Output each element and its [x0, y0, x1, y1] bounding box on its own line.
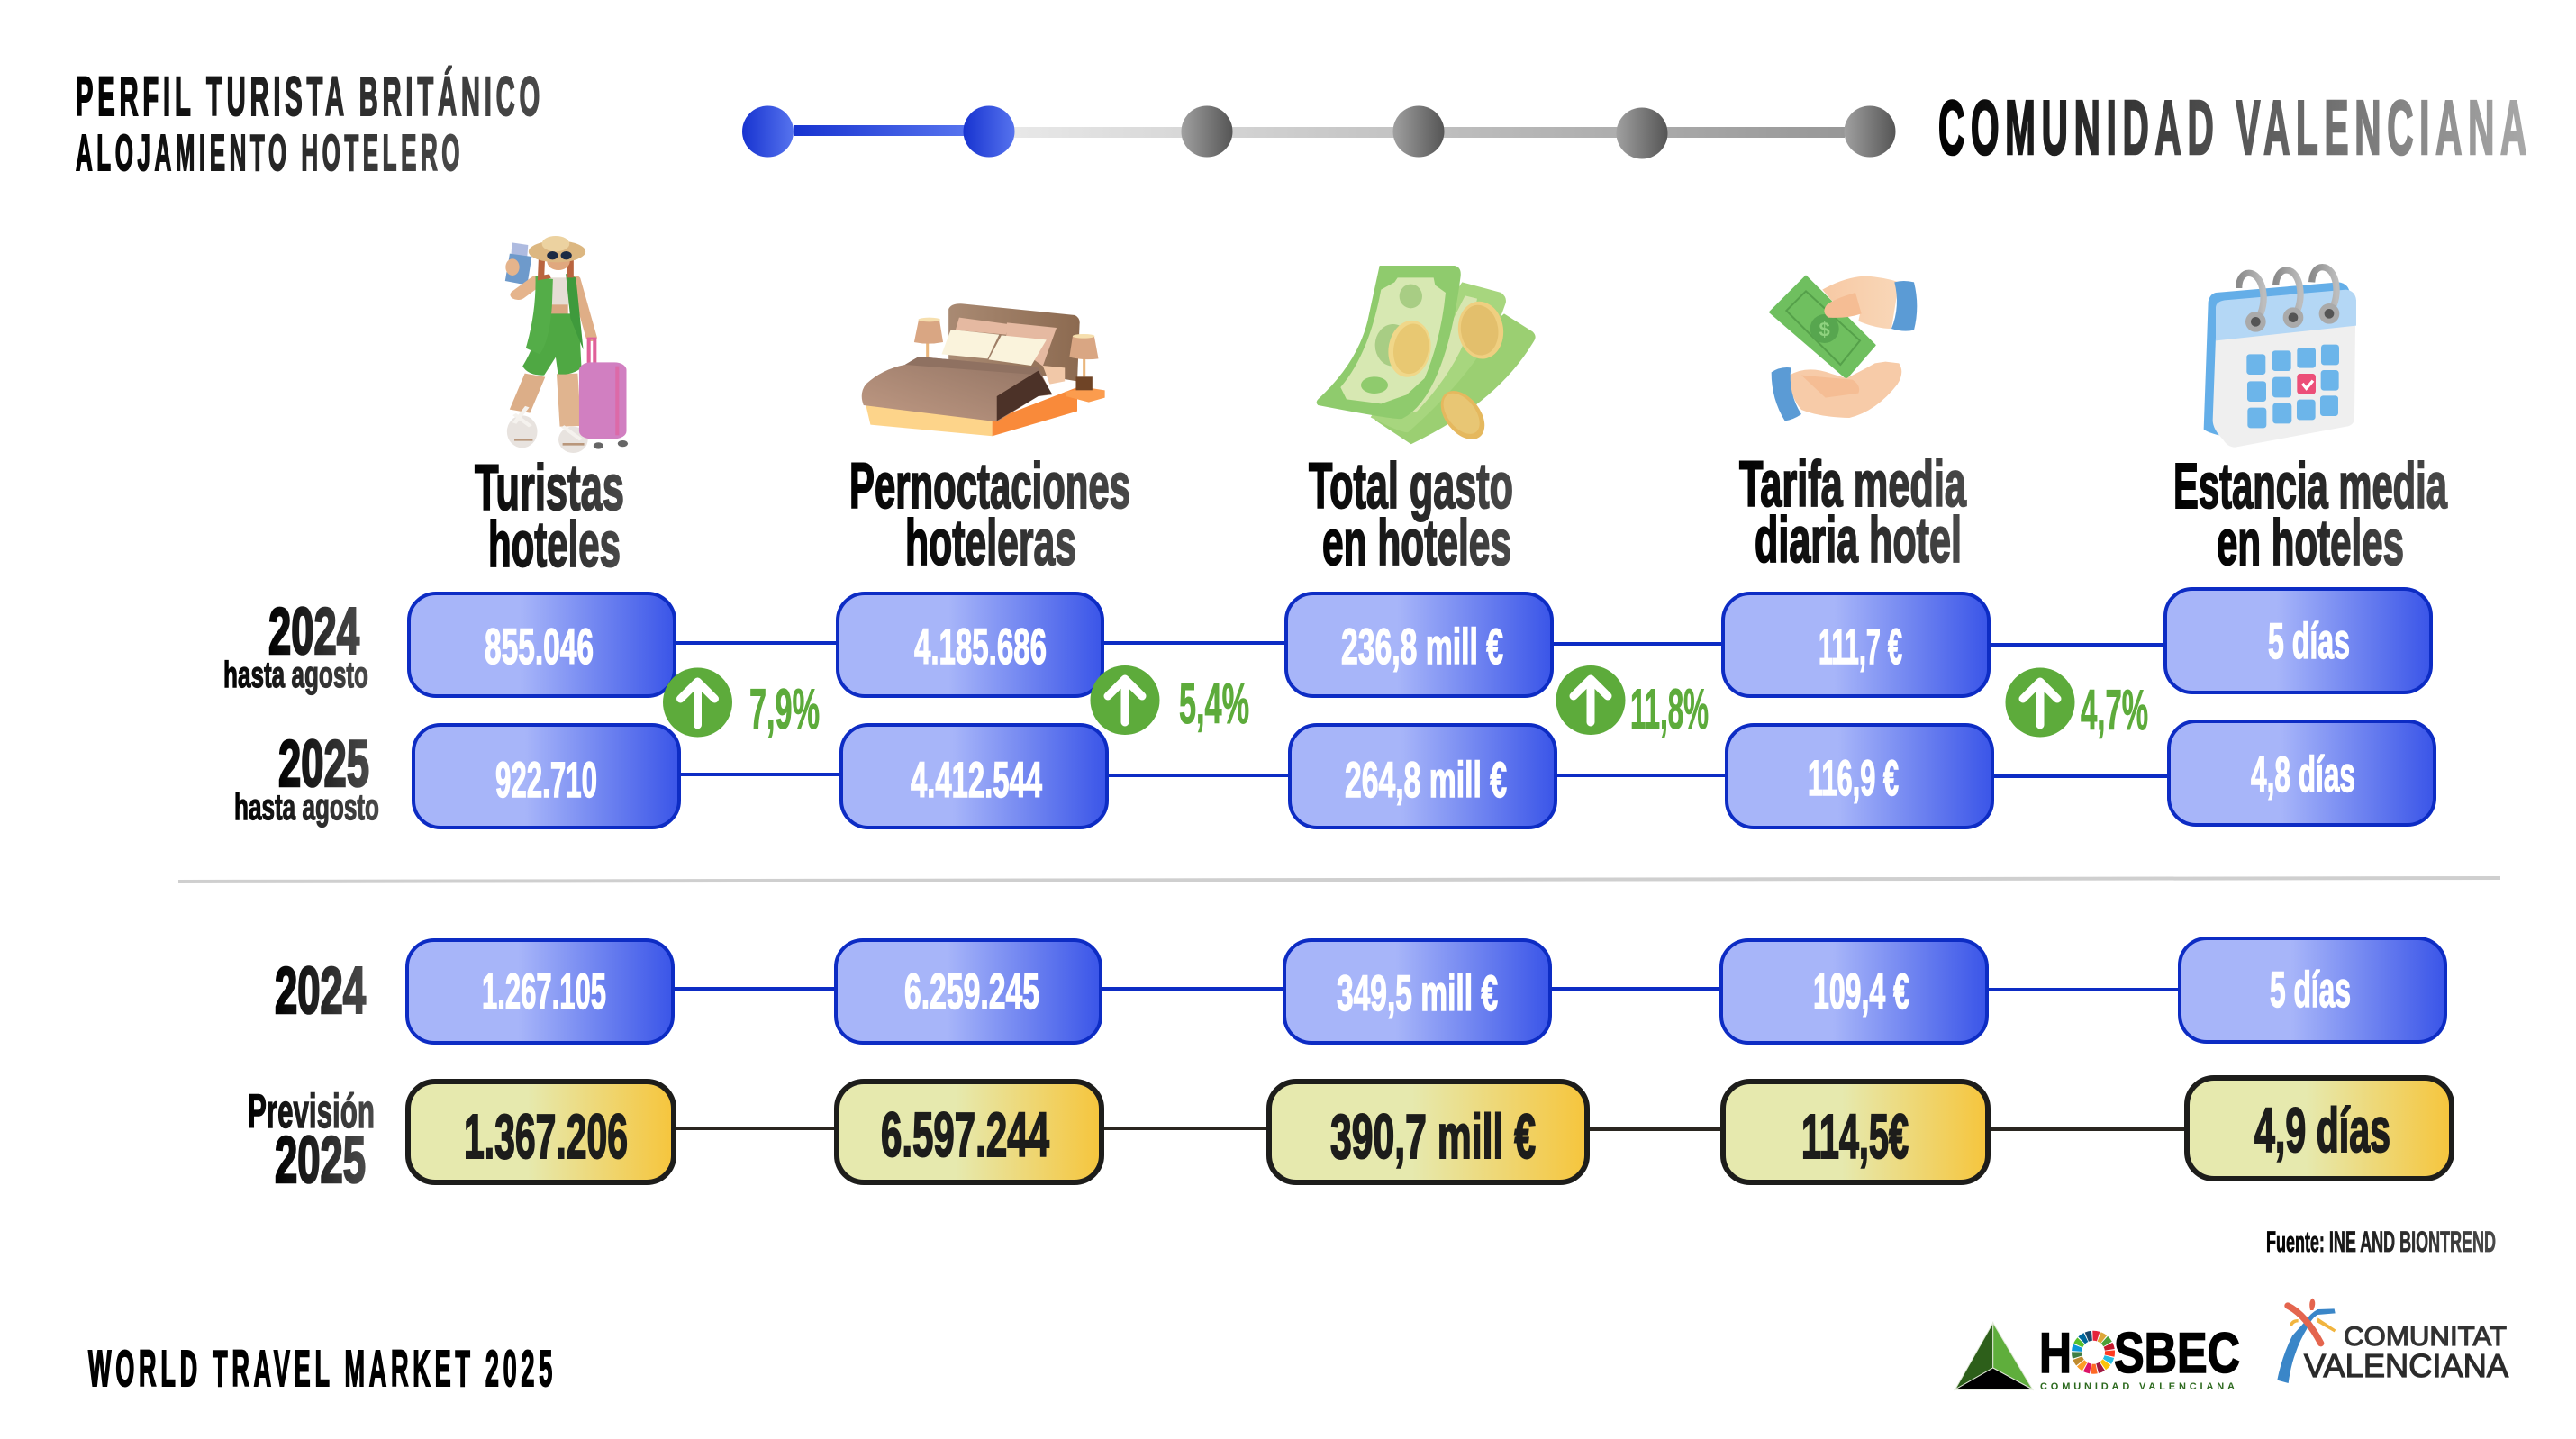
- forecast: 390,7 mill €: [1269, 1082, 1587, 1182]
- tracker dot 3: [1182, 106, 1232, 157]
- value: 111,7 €: 111,7 €: [1819, 618, 1902, 674]
- logo: comunitat valenciana: [2277, 1299, 2508, 1384]
- value: 236,8 mill €: [1286, 593, 1552, 696]
- value: 5 días: [2165, 589, 2431, 692]
- value: 5 días: [2180, 938, 2445, 1042]
- value: 855.046: [409, 593, 675, 696]
- growth badges: [663, 665, 2148, 742]
- row label: 2024: [268, 595, 359, 668]
- badge: up 5,4%: 5,4%: [1179, 673, 1249, 736]
- tracker dot 2: [964, 106, 1014, 157]
- infographic canvas: PERFIL TURISTA BRITÁNICO: [76, 66, 544, 127]
- logo: comunitat valenciana: VALENCIANA: [2304, 1347, 2508, 1384]
- progress tracker: [742, 106, 1895, 158]
- row: 2025 hasta agosto: [234, 721, 2435, 828]
- value: 4,8 días: 4,8 días: [2251, 746, 2355, 802]
- logo: hosbec: COMUNIDAD VALENCIANA: [2040, 1381, 2238, 1392]
- logo: hosbec: H: [2039, 1322, 2072, 1385]
- row label: [234, 728, 379, 828]
- row: 2024 full year: [275, 938, 2445, 1043]
- tracker dot 6: [1845, 106, 1895, 157]
- forecast: 4,9 días: [2187, 1078, 2452, 1179]
- value: 922.710: 922.710: [495, 751, 597, 808]
- logo: comunitat valenciana: COMUNITAT: [2344, 1322, 2507, 1352]
- heading: turistas hoteles: hoteles: [488, 510, 621, 581]
- heading: tarifa media diaria hotel: Tarifa media: [1739, 449, 1966, 520]
- heading: estancia media en hoteles: en hoteles: [2217, 508, 2404, 579]
- value: 116,9 €: 116,9 €: [1808, 749, 1899, 806]
- value: 4.185.686: 4.185.686: [914, 618, 1047, 674]
- value: 1.267.105: [407, 940, 673, 1043]
- value: 109,4 €: [1721, 940, 1987, 1043]
- badge: up 5,4%: [1090, 665, 1249, 736]
- badge: up 11,8%: [1556, 665, 1709, 741]
- icon: hands exchanging banknote: $: [1819, 318, 1830, 340]
- infographic canvas: WORLD TRAVEL MARKET 2025: [88, 1340, 557, 1398]
- forecast: 114,5€: 114,5€: [1801, 1101, 1909, 1172]
- value: 116,9 €: [1727, 725, 1992, 828]
- logo emblem: [2277, 1299, 2336, 1383]
- value: 349,5 mill €: [1284, 940, 1550, 1043]
- forecast: 4,9 días: 4,9 días: [2254, 1095, 2390, 1165]
- forecast: 6.597.244: [837, 1082, 1102, 1182]
- heading: pernoctaciones hoteleras: hoteleras: [905, 508, 1076, 579]
- icon: money: [1317, 266, 1536, 448]
- badge: up 7,9%: [663, 668, 820, 741]
- icon: hands exchanging banknote: [1770, 276, 1917, 421]
- row label: 2024: [275, 955, 366, 1027]
- header title: perfil turista: [76, 66, 544, 182]
- row label: [248, 1085, 375, 1197]
- badge: up 7,9%: 7,9%: [749, 678, 820, 741]
- icon: traveller: [505, 236, 628, 453]
- value: 349,5 mill €: 349,5 mill €: [1337, 964, 1498, 1021]
- row label: Previsión: [248, 1085, 375, 1138]
- logo triangle: [1955, 1323, 2033, 1389]
- heading: tarifa media diaria hotel: diaria hotel: [1755, 505, 1962, 576]
- forecast: 1.367.206: 1.367.206: [464, 1101, 628, 1172]
- value: 5 días: 5 días: [2268, 612, 2350, 669]
- logo: hosbec: SBEC: [2114, 1322, 2240, 1385]
- header title: perfil turista: ALOJAMIENTO HOTELERO: [76, 124, 464, 182]
- icon: bed: [862, 303, 1105, 436]
- forecast: 114,5€: [1723, 1082, 1988, 1182]
- row: 2024 hasta agosto: [223, 589, 2431, 696]
- heading: estancia media en hoteles: [2173, 451, 2447, 579]
- heading: tarifa media diaria hotel: [1739, 449, 1966, 576]
- row: previsión 2025: [248, 1078, 2452, 1197]
- value: 264,8 mill €: [1290, 725, 1556, 828]
- value: 109,4 €: 109,4 €: [1813, 963, 1909, 1019]
- growth badges: 11,8%: [1630, 678, 1709, 741]
- value: 1.267.105: 1.267.105: [482, 963, 606, 1019]
- forecast: 390,7 mill €: 390,7 mill €: [1330, 1101, 1536, 1172]
- value: 6.259.245: [836, 940, 1101, 1043]
- heading: turistas hoteles: [475, 453, 624, 581]
- value: 4.412.544: [841, 725, 1107, 828]
- tracker dot 4: [1392, 106, 1445, 157]
- badge: up 4,7%: 4,7%: [2081, 679, 2148, 742]
- logo: hosbec: [1955, 1322, 2240, 1392]
- value: 922.710: [413, 725, 679, 828]
- row label: 2025: [275, 1124, 366, 1197]
- logo ring of coloured segments: [2077, 1335, 2109, 1369]
- value: 855.046: 855.046: [485, 618, 594, 674]
- heading: turistas hoteles: Turistas: [475, 453, 624, 524]
- value: 236,8 mill €: 236,8 mill €: [1341, 618, 1503, 674]
- heading: total gasto en hoteles: en hoteles: [1322, 508, 1511, 579]
- forecast: 6.597.244: 6.597.244: [881, 1100, 1049, 1170]
- badge: up 4,7%: [2005, 668, 2148, 742]
- value: 6.259.245: 6.259.245: [904, 963, 1039, 1019]
- heading: total gasto en hoteles: Total gasto: [1309, 451, 1513, 522]
- heading: pernoctaciones hoteleras: Pernoctaciones: [849, 451, 1130, 522]
- row label: hasta agosto: [223, 654, 368, 695]
- value: 4,8 días: [2169, 721, 2435, 825]
- row label: [223, 595, 368, 695]
- column headings: [475, 449, 2447, 581]
- value: 4.412.544: 4.412.544: [911, 751, 1042, 808]
- value: 5 días: 5 días: [2270, 961, 2351, 1018]
- heading: pernoctaciones hoteleras: [849, 451, 1130, 579]
- icon: calendar: [2204, 267, 2356, 448]
- tracker dot 1: [742, 106, 794, 157]
- value: 4.185.686: [838, 593, 1102, 696]
- row label: 2025: [278, 728, 369, 801]
- value: 111,7 €: [1723, 593, 1989, 696]
- tracker dot 5: [1616, 108, 1668, 158]
- value: 264,8 mill €: 264,8 mill €: [1345, 751, 1507, 808]
- heading: total gasto en hoteles: [1309, 451, 1513, 579]
- row label: hasta agosto: [234, 786, 379, 828]
- forecast: 1.367.206: [408, 1082, 674, 1182]
